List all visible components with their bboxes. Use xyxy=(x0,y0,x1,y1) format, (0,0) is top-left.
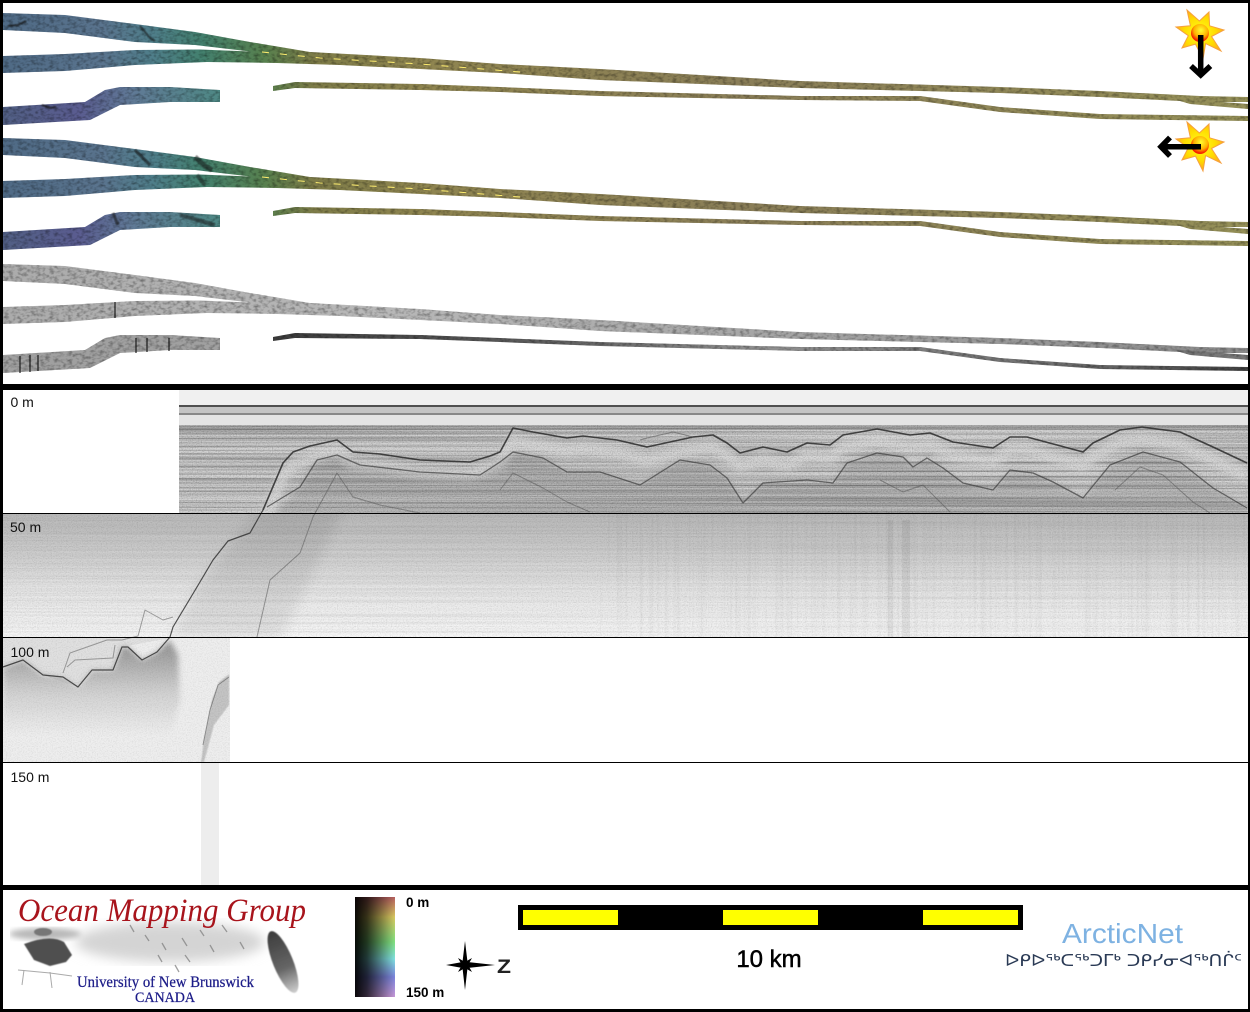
logo university line: University of New Brunswick xyxy=(77,974,254,991)
primary seabed trace xyxy=(263,427,1247,510)
deep reflector trace xyxy=(257,473,420,637)
sonar band 0 to 50 m xyxy=(179,390,1248,523)
logo country line: CANADA xyxy=(135,990,195,1006)
icon: north compass star xyxy=(446,941,511,990)
depth labels: 100 m xyxy=(10,644,49,660)
band divider lines xyxy=(3,514,1248,762)
logo: ArcticNet xyxy=(1005,918,1242,971)
legend: depth colour bar: 150 m xyxy=(406,985,444,1000)
depth labels: 50 m xyxy=(10,519,41,535)
legend: depth colour bar xyxy=(355,895,444,1000)
logo: Ocean Mapping Group xyxy=(10,900,306,1002)
sonar band 100 to 150 m xyxy=(3,638,230,762)
panel: swath map xyxy=(3,3,1248,384)
secondary reflector trace xyxy=(267,452,1247,508)
yellow nadir dashes xyxy=(262,52,520,197)
second ghost trace xyxy=(67,645,115,667)
eastern deep reflector trace xyxy=(1115,467,1210,513)
arrow: west xyxy=(1161,138,1201,156)
greyscale swath set xyxy=(3,264,1248,373)
logo: ArcticNet: ᐅᑭᐅᖅᑕᖅᑐᒥᒃ ᑐᑭᓯᓂᐊᖅᑎᒌᑦ xyxy=(1005,950,1242,971)
panel: sonar profile xyxy=(3,390,1248,885)
icon: north compass star: Z xyxy=(497,956,511,978)
legend: depth colour bar: 0 m xyxy=(406,895,429,910)
depth labels: 150 m xyxy=(10,769,49,785)
sonar band 150 m and below xyxy=(201,763,219,885)
grey swath dark scan lines xyxy=(20,302,169,373)
colour swath set 2 xyxy=(3,138,1248,250)
icon: explosion marker lower xyxy=(1176,122,1224,171)
depth labels: 0 m xyxy=(10,394,34,410)
sonar band 50 to 100 m xyxy=(3,505,1248,640)
depth labels xyxy=(10,394,49,785)
right-hand deep reflector trace xyxy=(500,473,590,512)
swath relief details xyxy=(8,21,215,225)
slope trace xyxy=(3,510,263,687)
seabed reflector traces xyxy=(3,427,1247,687)
scale bar xyxy=(518,905,1023,973)
icon: explosion marker upper xyxy=(1176,10,1224,59)
arrow: south xyxy=(1191,35,1210,75)
scale bar: 10 km xyxy=(736,946,802,973)
far-right deep reflector trace xyxy=(880,480,950,512)
upper branch trace xyxy=(640,432,693,440)
logo: ArcticNet: ArcticNet xyxy=(1062,918,1183,949)
colour swath set 1 xyxy=(3,13,1248,125)
panel: footer xyxy=(3,890,1248,1009)
ghost trace over the shelf xyxy=(63,610,173,673)
logo title: Ocean Mapping Group xyxy=(18,893,306,929)
